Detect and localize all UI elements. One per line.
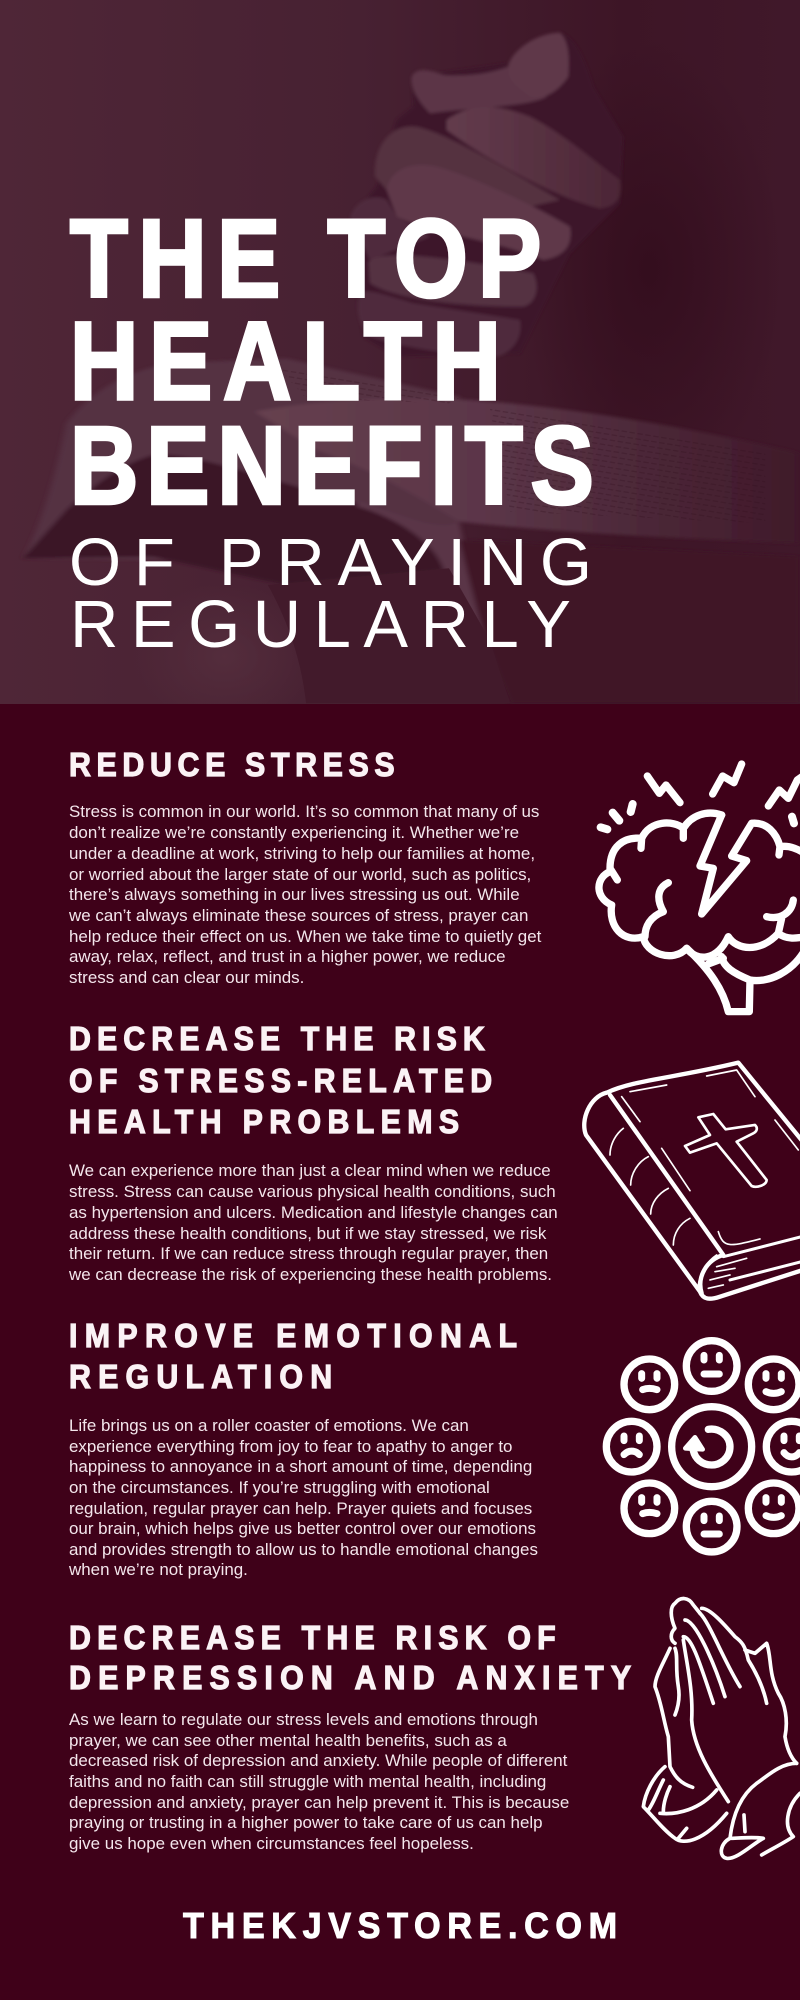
footer: website: THEKJVSTORE.COM	[183, 1906, 617, 1946]
text block: emotional regulation: our brain, which helps give us better control over our emotions	[69, 1519, 536, 1538]
text block: reduce stress: away, relax, reflect, and trust in a higher power, we reduce	[69, 947, 506, 966]
section: depression and anxiety	[69, 1619, 631, 1853]
text block: stress-related health problems: as hypertension and ulcers. Medication and lifestyle changes can	[69, 1203, 558, 1222]
text block: emotional regulation: regulation, regular prayer can help. Prayer quiets and focuses	[69, 1499, 532, 1518]
text block: depression and anxiety: decreased risk of depression and anxiety. While people of different	[69, 1751, 568, 1770]
text block: stress-related health problems: we can decrease the risk of experiencing these health problems.	[68, 1265, 552, 1284]
photo: clasped hands	[350, 33, 623, 357]
title: REGULARLY	[70, 587, 571, 662]
heading: reduce stress: REDUCE STRESS	[69, 746, 395, 783]
heading: depression and anxiety: DECREASE THE RISK OF	[69, 1619, 556, 1656]
icon: stressed brain	[599, 764, 800, 1012]
text block: depression and anxiety	[69, 1710, 569, 1853]
photo: open book	[23, 358, 800, 730]
hero photo: praying hands on open book	[0, 0, 800, 730]
text block: stress-related health problems: their return. If we can reduce stress through regular prayer, then	[69, 1244, 548, 1263]
icon: bible with cross	[584, 1063, 800, 1299]
text block: reduce stress: don’t realize we’re constantly experiencing it. Whether we’re	[69, 823, 519, 842]
text block: reduce stress: under a deadline at work, striving to help our families at home,	[69, 844, 535, 863]
text block: stress-related health problems: stress. Stress can cause various physical health conditions, such	[69, 1182, 556, 1201]
text block: reduce stress	[68, 802, 542, 987]
title	[69, 197, 594, 662]
text block: stress-related health problems: address these health conditions, but if we stay stressed, we risk	[69, 1224, 547, 1243]
heading: stress-related health problems: HEALTH PROBLEMS	[69, 1103, 459, 1140]
title: OF PRAYING	[69, 525, 592, 600]
text block: depression and anxiety: depression and anxiety, prayer can help prevent it. This is because	[69, 1793, 569, 1812]
text block: emotional regulation: experience everything from joy to fear to apathy to anger to	[69, 1437, 512, 1456]
text block: stress-related health problems: We can experience more than just a clear mind when we reduce	[69, 1161, 551, 1180]
text block: depression and anxiety: As we learn to regulate our stress levels and emotions through	[69, 1710, 538, 1729]
text block: emotional regulation: happiness to annoyance in a short amount of time, depending	[69, 1457, 532, 1476]
text block: emotional regulation: and provides strength to allow us to handle emotional changes	[69, 1540, 538, 1559]
text block: reduce stress: we can’t always eliminate these sources of stress, prayer can	[68, 906, 528, 925]
heading: stress-related health problems	[69, 1020, 492, 1140]
text block: stress-related health problems	[68, 1161, 558, 1284]
section: emotional regulation	[68, 1317, 538, 1579]
heading: emotional regulation: IMPROVE EMOTIONAL	[69, 1317, 517, 1354]
text block: emotional regulation: Life brings us on a roller coaster of emotions. We can	[69, 1416, 469, 1435]
title: THE TOP	[70, 197, 541, 320]
heading: depression and anxiety: DEPRESSION AND ANXIETY	[69, 1659, 631, 1696]
text block: depression and anxiety: praying or trusting in a higher power to take care of us can help	[69, 1813, 543, 1832]
heading: emotional regulation	[69, 1317, 517, 1395]
text block: emotional regulation: on the circumstances. If you’re struggling with emotional	[69, 1478, 490, 1497]
heading: stress-related health problems: DECREASE THE RISK	[69, 1020, 485, 1057]
section: reduce stress	[68, 746, 542, 987]
text block: reduce stress: or worried about the larger state of our world, such as politics,	[69, 865, 531, 884]
text block: depression and anxiety: prayer, we can see other mental health benefits, such as a	[69, 1731, 507, 1750]
text block: depression and anxiety: give us hope even when circumstances feel hopeless.	[69, 1834, 474, 1853]
text block: reduce stress: Stress is common in our world. It’s so common that many of us	[69, 802, 539, 821]
title: HEALTH	[70, 299, 501, 423]
text block: emotional regulation	[68, 1416, 538, 1579]
text block: depression and anxiety: faiths and no faith can still struggle with mental health, including	[69, 1772, 546, 1791]
heading: depression and anxiety	[69, 1619, 631, 1696]
panel: content background	[0, 704, 800, 2000]
text block: reduce stress: help reduce their effect on us. When we take time to quietly get	[69, 927, 542, 946]
heading: stress-related health problems: OF STRESS-RELATED	[69, 1062, 492, 1099]
section: stress-related health problems	[68, 1020, 558, 1284]
text block: reduce stress: stress and can clear our minds.	[69, 968, 304, 987]
icon: praying hands	[643, 1599, 800, 1858]
text block: reduce stress: there’s always something in our lives stressing us out. While	[69, 885, 520, 904]
title: BENEFITS	[70, 404, 594, 527]
heading: emotional regulation: REGULATION	[69, 1358, 332, 1395]
text block: emotional regulation: when we’re not praying.	[68, 1560, 248, 1579]
icon: ring of emotion faces	[606, 1341, 800, 1552]
